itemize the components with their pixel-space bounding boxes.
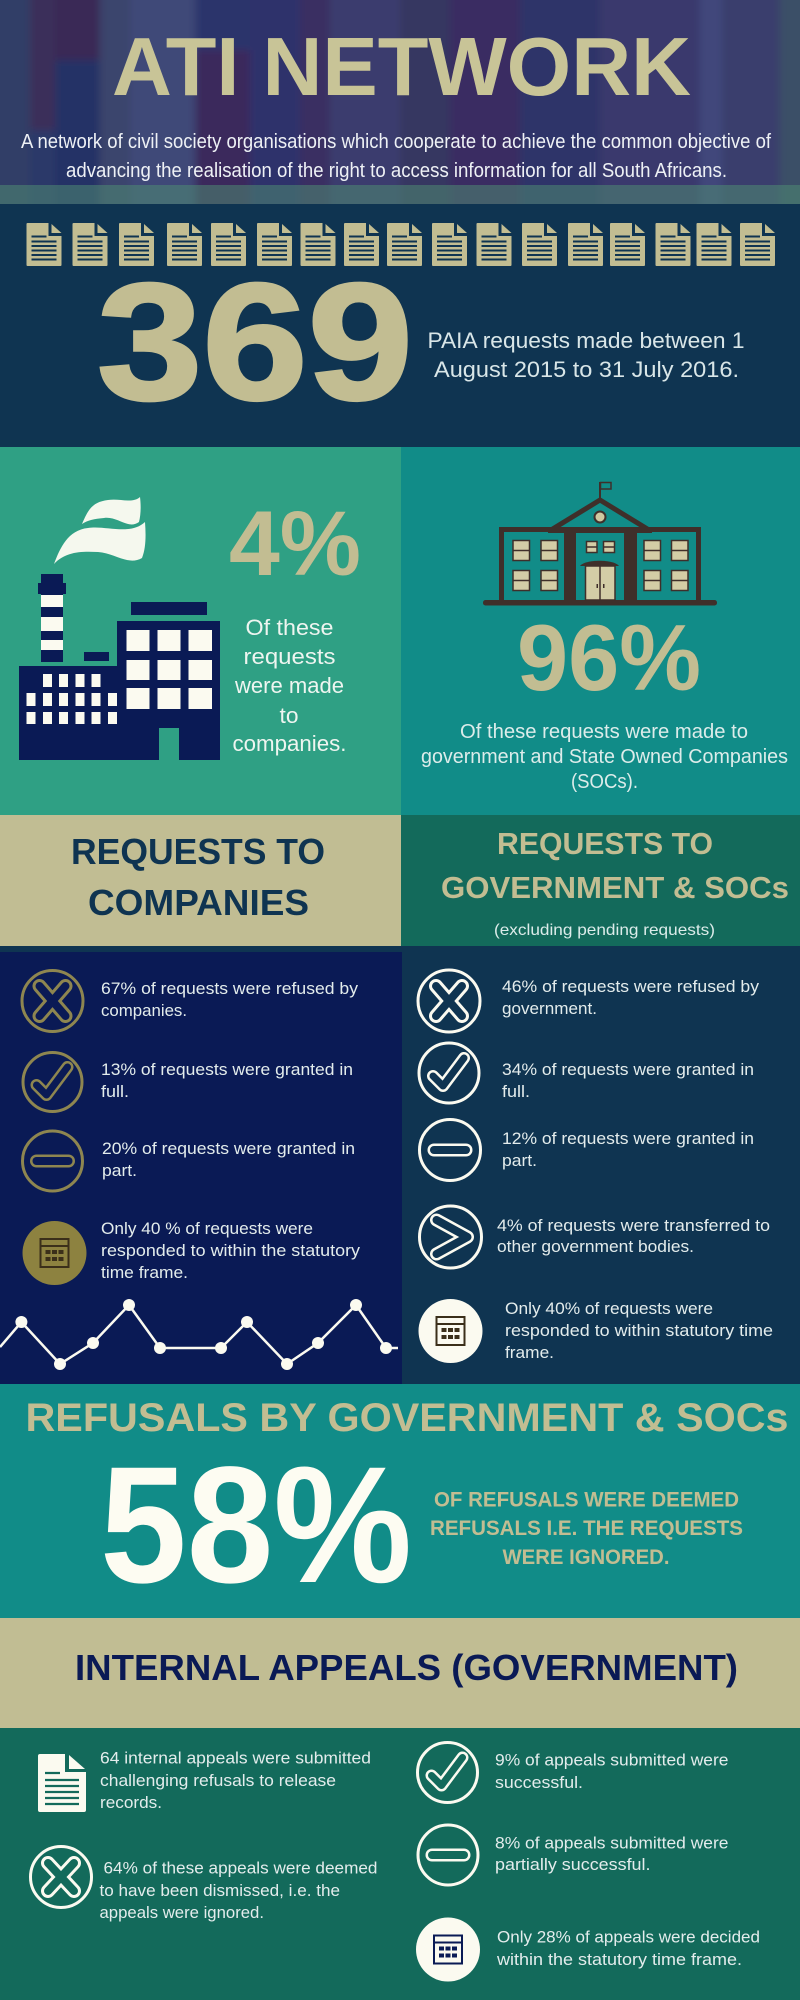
caption: made to government: (SOCs). xyxy=(571,771,638,793)
heading panel: internal appeals: INTERNAL APPEALS (GOVERNMENT) xyxy=(75,1647,738,1688)
item: appeals submitted: challenging refusals to release xyxy=(100,1771,336,1790)
heading panel: requests to government xyxy=(401,815,800,946)
item: appeals decided on time xyxy=(416,1918,760,1982)
caption: deemed refusals: OF REFUSALS WERE DEEMED xyxy=(434,1488,739,1512)
caption: made to government: Of these requests were made to xyxy=(460,721,748,743)
item: statutory time frame: responded to within statutory time xyxy=(505,1321,773,1340)
item: granted in part: 20% of requests were granted in xyxy=(102,1139,355,1158)
item: granted in full: full. xyxy=(101,1082,129,1101)
item: appeals submitted: records. xyxy=(100,1793,162,1812)
caption: deemed refusals xyxy=(430,1488,743,1569)
item: refused by companies: 67% of requests were refused by xyxy=(101,979,359,998)
item: refused by companies: companies. xyxy=(101,1001,187,1020)
caption: deemed refusals: WERE IGNORED. xyxy=(502,1546,670,1569)
panel: 4% companies xyxy=(0,447,401,815)
caption: made to companies: Of these xyxy=(246,615,334,640)
caption: made to companies: to xyxy=(280,703,298,728)
heading panel: requests to companies: REQUESTS TO xyxy=(71,831,325,872)
item: appeals submitted xyxy=(38,1748,371,1812)
caption: made to companies: requests xyxy=(244,644,336,669)
item: appeals partially successful: 8% of appeals submitted were xyxy=(495,1834,728,1852)
item: transferred xyxy=(420,1206,770,1268)
item: appeals dismissed: appeals were ignored. xyxy=(100,1903,264,1922)
caption: made to companies: companies. xyxy=(232,731,346,756)
panel: 96% government xyxy=(401,447,800,815)
panel: appeals results xyxy=(0,1728,800,2000)
item: statutory time frame xyxy=(22,1219,361,1285)
item: appeals decided on time: Only 28% of appeals were decided xyxy=(497,1928,760,1946)
item: appeals partially successful: partially successful. xyxy=(495,1855,650,1874)
icon: factory xyxy=(19,497,220,760)
stat: 58%: 58% xyxy=(100,1433,412,1618)
caption: PAIA requests xyxy=(428,328,744,382)
heading panel: requests to companies: COMPANIES xyxy=(88,882,309,923)
item: appeals decided on time: within the statutory time frame. xyxy=(496,1950,742,1969)
item: granted in full: full. xyxy=(502,1082,530,1101)
caption: PAIA requests: August 2015 to 31 July 2016. xyxy=(434,357,739,382)
item: refused by government xyxy=(418,970,760,1032)
panel: refusals xyxy=(0,1384,800,1618)
subtitle: advancing the realisation of the right to access information for all South Africans. xyxy=(66,160,727,182)
stat: 4%: 4% xyxy=(229,493,361,595)
caption: made to companies: were made xyxy=(234,673,344,698)
item: statutory time frame: time frame. xyxy=(101,1263,188,1282)
panel: 369 requests xyxy=(0,204,800,447)
item: granted in full: 34% of requests were granted in xyxy=(502,1060,754,1079)
item: granted in part: part. xyxy=(102,1161,137,1180)
item: granted in part xyxy=(22,1131,355,1191)
item: statutory time frame xyxy=(418,1299,773,1363)
heading panel: requests to government: GOVERNMENT & SOCs xyxy=(441,870,789,905)
item: granted in part: 12% of requests were granted in xyxy=(502,1129,754,1148)
item: refused by government: government. xyxy=(502,999,597,1018)
title: ATI NETWORK xyxy=(112,20,691,113)
item: statutory time frame: Only 40 % of requests were xyxy=(101,1219,313,1238)
item: statutory time frame: responded to within the statutory xyxy=(101,1241,361,1260)
item: statutory time frame: Only 40% of requests were xyxy=(505,1299,713,1318)
panel: government results xyxy=(402,946,800,1384)
item: refused by government: 46% of requests were refused by xyxy=(502,977,760,996)
item: granted in part: part. xyxy=(502,1151,537,1170)
heading: refusals by government: REFUSALS BY GOVERNMENT & SOCs xyxy=(26,1396,788,1440)
item: appeals submitted: 64 internal appeals were submitted xyxy=(100,1748,371,1768)
item: appeals partially successful xyxy=(418,1825,728,1885)
item: appeals successful xyxy=(418,1742,728,1802)
heading panel: internal appeals xyxy=(0,1618,800,1728)
item: statutory time frame: frame. xyxy=(505,1343,554,1362)
item: transferred: 4% of requests were transferred to xyxy=(497,1216,770,1235)
subtitle xyxy=(21,131,771,182)
item: appeals dismissed: to have been dismissed, i.e. the xyxy=(100,1881,340,1900)
heading panel: requests to government: REQUESTS TO xyxy=(497,826,713,861)
item: granted in full xyxy=(23,1052,353,1112)
caption: deemed refusals: REFUSALS I.E. THE REQUESTS xyxy=(430,1517,743,1540)
panel: header xyxy=(0,0,800,220)
item: transferred: other government bodies. xyxy=(497,1237,694,1256)
icon row: documents xyxy=(26,223,775,266)
stat: 96%: 96% xyxy=(517,605,701,710)
panel: company results xyxy=(0,946,402,1384)
item: refused by companies xyxy=(22,970,359,1032)
caption: made to government xyxy=(421,721,788,793)
item: appeals successful: successful. xyxy=(495,1773,583,1792)
header book photo background xyxy=(0,0,800,220)
item: granted in full xyxy=(419,1043,754,1103)
item: appeals dismissed xyxy=(30,1846,378,1922)
item: appeals successful: 9% of appeals submitted were xyxy=(495,1750,728,1770)
caption: made to companies xyxy=(232,615,346,756)
heading panel: requests to companies xyxy=(0,815,401,946)
item: granted in part xyxy=(420,1120,754,1180)
caption: PAIA requests: PAIA requests made between 1 xyxy=(428,328,744,353)
item: granted in full: 13% of requests were granted in xyxy=(101,1060,353,1079)
icon: government building xyxy=(483,482,717,606)
caption: made to government: government and State Owned Companies xyxy=(421,746,788,768)
item: appeals dismissed: 64% of these appeals were deemed xyxy=(104,1858,378,1878)
heading panel: requests to government: (excluding pending requests) xyxy=(494,922,715,939)
big number 369: 369 xyxy=(97,250,413,435)
line graphic xyxy=(0,1299,398,1370)
